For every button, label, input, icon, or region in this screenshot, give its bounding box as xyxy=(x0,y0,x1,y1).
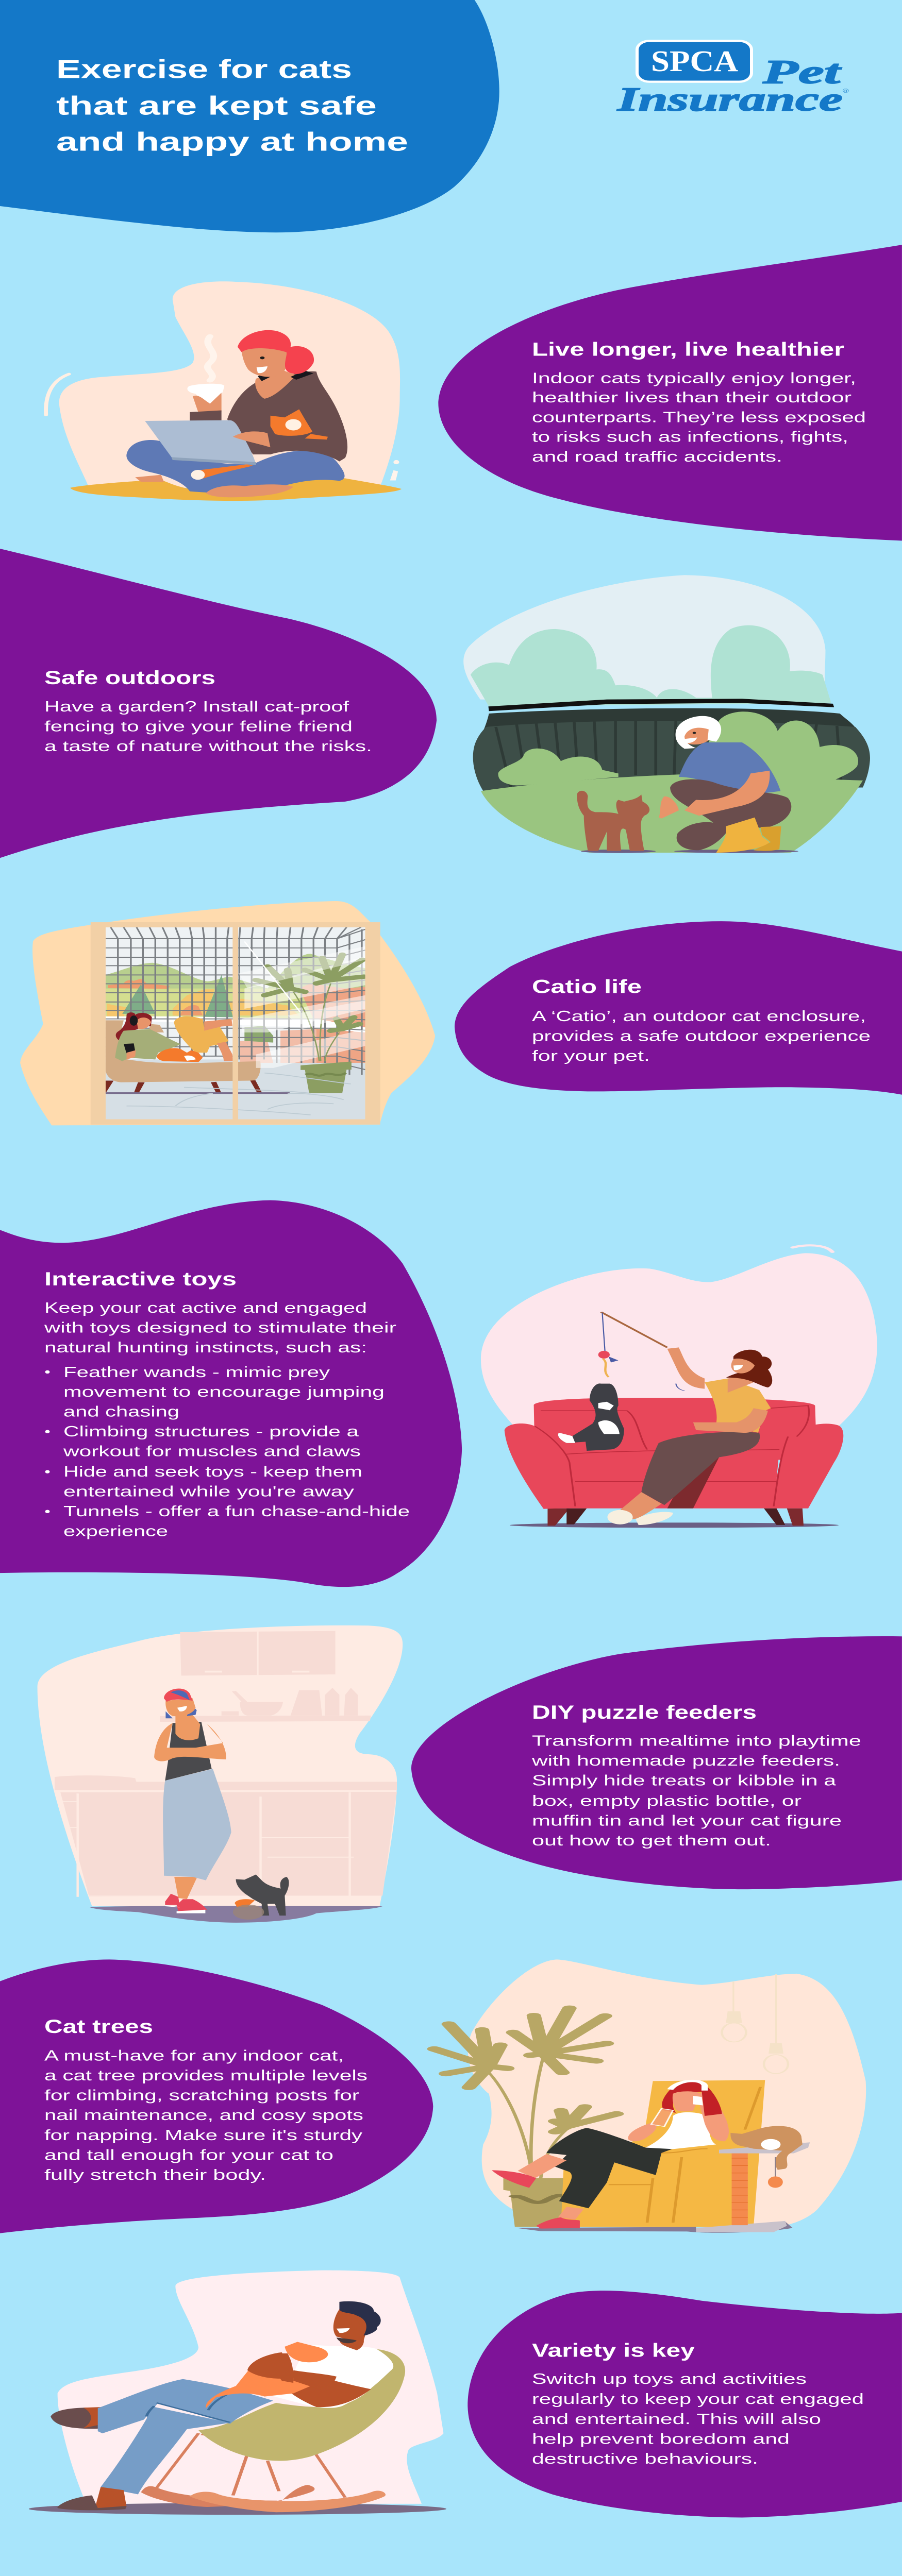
body text: for climbing, scratching posts for xyxy=(44,2088,359,2104)
body text xyxy=(531,1733,861,1849)
bullet list xyxy=(45,1364,410,1539)
body text xyxy=(532,1008,871,1064)
body text: nail maintenance, and cosy spots xyxy=(44,2108,363,2124)
purple blob xyxy=(438,245,902,540)
panel: interactive toys xyxy=(0,1200,462,1587)
body text: for your pet. xyxy=(532,1048,650,1064)
body text: healthier lives than their outdoor xyxy=(532,389,851,406)
body text: help prevent boredom and xyxy=(532,2431,790,2447)
header blue blob xyxy=(0,0,499,232)
bullet list: movement to encourage jumping xyxy=(63,1384,385,1400)
purple blob xyxy=(411,1636,902,1889)
logo: SPCA Pet Insurance: Pet xyxy=(762,54,842,91)
bullet list: workout for muscles and claws xyxy=(63,1444,361,1460)
body text: Simply hide treats or kibble in a xyxy=(532,1773,837,1789)
illustration: woman with feather wand and cat on red sofa xyxy=(481,1245,877,1528)
intro text: Keep your cat active and engaged xyxy=(44,1300,367,1316)
illustration: man in rocking chair holding cat xyxy=(29,2270,446,2515)
panel: variety is key xyxy=(467,2291,902,2517)
body text: Transform mealtime into playtime xyxy=(532,1733,861,1749)
panel: catio life xyxy=(455,921,902,1095)
body text: Indoor cats typically enjoy longer, xyxy=(532,370,856,386)
intro text xyxy=(44,1300,396,1356)
bullet list: Climbing structures - provide a xyxy=(63,1423,359,1440)
body text: for napping. Make sure it's sturdy xyxy=(44,2127,363,2143)
heading: Interactive toys xyxy=(44,1268,237,1290)
purple blob xyxy=(455,921,902,1095)
heading: Variety is key xyxy=(532,2340,695,2361)
body text: a cat tree provides multiple levels xyxy=(44,2067,368,2084)
body text: Have a garden? Install cat-proof xyxy=(44,699,349,715)
bullet list: entertained while you're away xyxy=(63,1484,355,1500)
body text: A must-have for any indoor cat, xyxy=(44,2048,344,2064)
title: that are kept safe xyxy=(56,91,377,121)
body text: provides a safe outdoor experience xyxy=(532,1028,871,1044)
body text xyxy=(532,2371,864,2467)
body text: Switch up toys and activities xyxy=(532,2371,807,2387)
heading: Live longer, live healthier xyxy=(532,338,844,360)
illustration: woman in kitchen with cat and puzzle feeder xyxy=(38,1625,403,1923)
panel: safe outdoors xyxy=(0,549,437,858)
purple blob xyxy=(0,1959,433,2233)
intro text: with toys designed to stimulate their xyxy=(44,1320,396,1336)
body text: fencing to give your feline friend xyxy=(44,719,353,735)
body text: regularly to keep your cat engaged xyxy=(532,2392,864,2408)
body text xyxy=(44,699,372,755)
bullet list: and chasing xyxy=(63,1404,179,1420)
panel: DIY puzzle feeders xyxy=(411,1636,902,1889)
purple blob xyxy=(467,2291,902,2517)
heading: Cat trees xyxy=(44,2015,153,2037)
logo: SPCA Pet Insurance: ® xyxy=(843,87,849,94)
bullet list: experience xyxy=(63,1523,168,1539)
panel: live longer xyxy=(438,245,902,540)
body text: counterparts. They’re less exposed xyxy=(532,410,866,426)
body text: muffin tin and let your cat figure xyxy=(532,1813,842,1829)
purple blob xyxy=(0,1200,462,1587)
body text: out how to get them out. xyxy=(532,1833,771,1849)
title: Exercise for cats xyxy=(56,54,352,84)
title xyxy=(56,54,408,157)
panel: cat trees xyxy=(0,1959,433,2233)
bullet list: Hide and seek toys - keep them xyxy=(63,1464,362,1480)
body text: and entertained. This will also xyxy=(532,2411,821,2427)
logo: SPCA Pet Insurance: Insurance xyxy=(617,81,843,118)
bullet list: Tunnels - offer a fun chase-and-hide xyxy=(63,1503,410,1520)
body text: a taste of nature without the risks. xyxy=(44,738,372,755)
bullet list: Feather wands - mimic prey xyxy=(63,1364,330,1381)
body text: and tall enough for your cat to xyxy=(44,2147,333,2163)
logo: SPCA Pet Insurance xyxy=(617,41,849,118)
illustration: woman with laptop and cat xyxy=(46,281,402,501)
body text: destructive behaviours. xyxy=(532,2451,758,2467)
body text: to risks such as infections, fights, xyxy=(532,429,848,445)
body text: fully stretch their body. xyxy=(44,2167,266,2183)
body text: and road traffic accidents. xyxy=(532,449,782,465)
title: and happy at home xyxy=(56,127,408,157)
illustration: woman in yellow chair with plant and cat tree xyxy=(435,1959,866,2233)
purple blob xyxy=(0,549,437,858)
body text: box, empty plastic bottle, or xyxy=(532,1793,801,1809)
body text xyxy=(532,370,866,465)
heading: Catio life xyxy=(532,976,642,997)
logo: SPCA Pet Insurance: SPCA xyxy=(651,44,738,78)
body text: with homemade puzzle feeders. xyxy=(531,1753,840,1769)
body text xyxy=(44,2048,368,2183)
heading: DIY puzzle feeders xyxy=(532,1701,757,1723)
body text: A ‘Catio’, an outdoor cat enclosure, xyxy=(532,1008,866,1024)
header panel xyxy=(0,0,499,232)
intro text: natural hunting instincts, such as: xyxy=(44,1340,367,1356)
heading: Safe outdoors xyxy=(44,667,215,688)
illustration: catio enclosure xyxy=(20,901,435,1125)
illustration: woman and cat in garden xyxy=(463,575,870,853)
